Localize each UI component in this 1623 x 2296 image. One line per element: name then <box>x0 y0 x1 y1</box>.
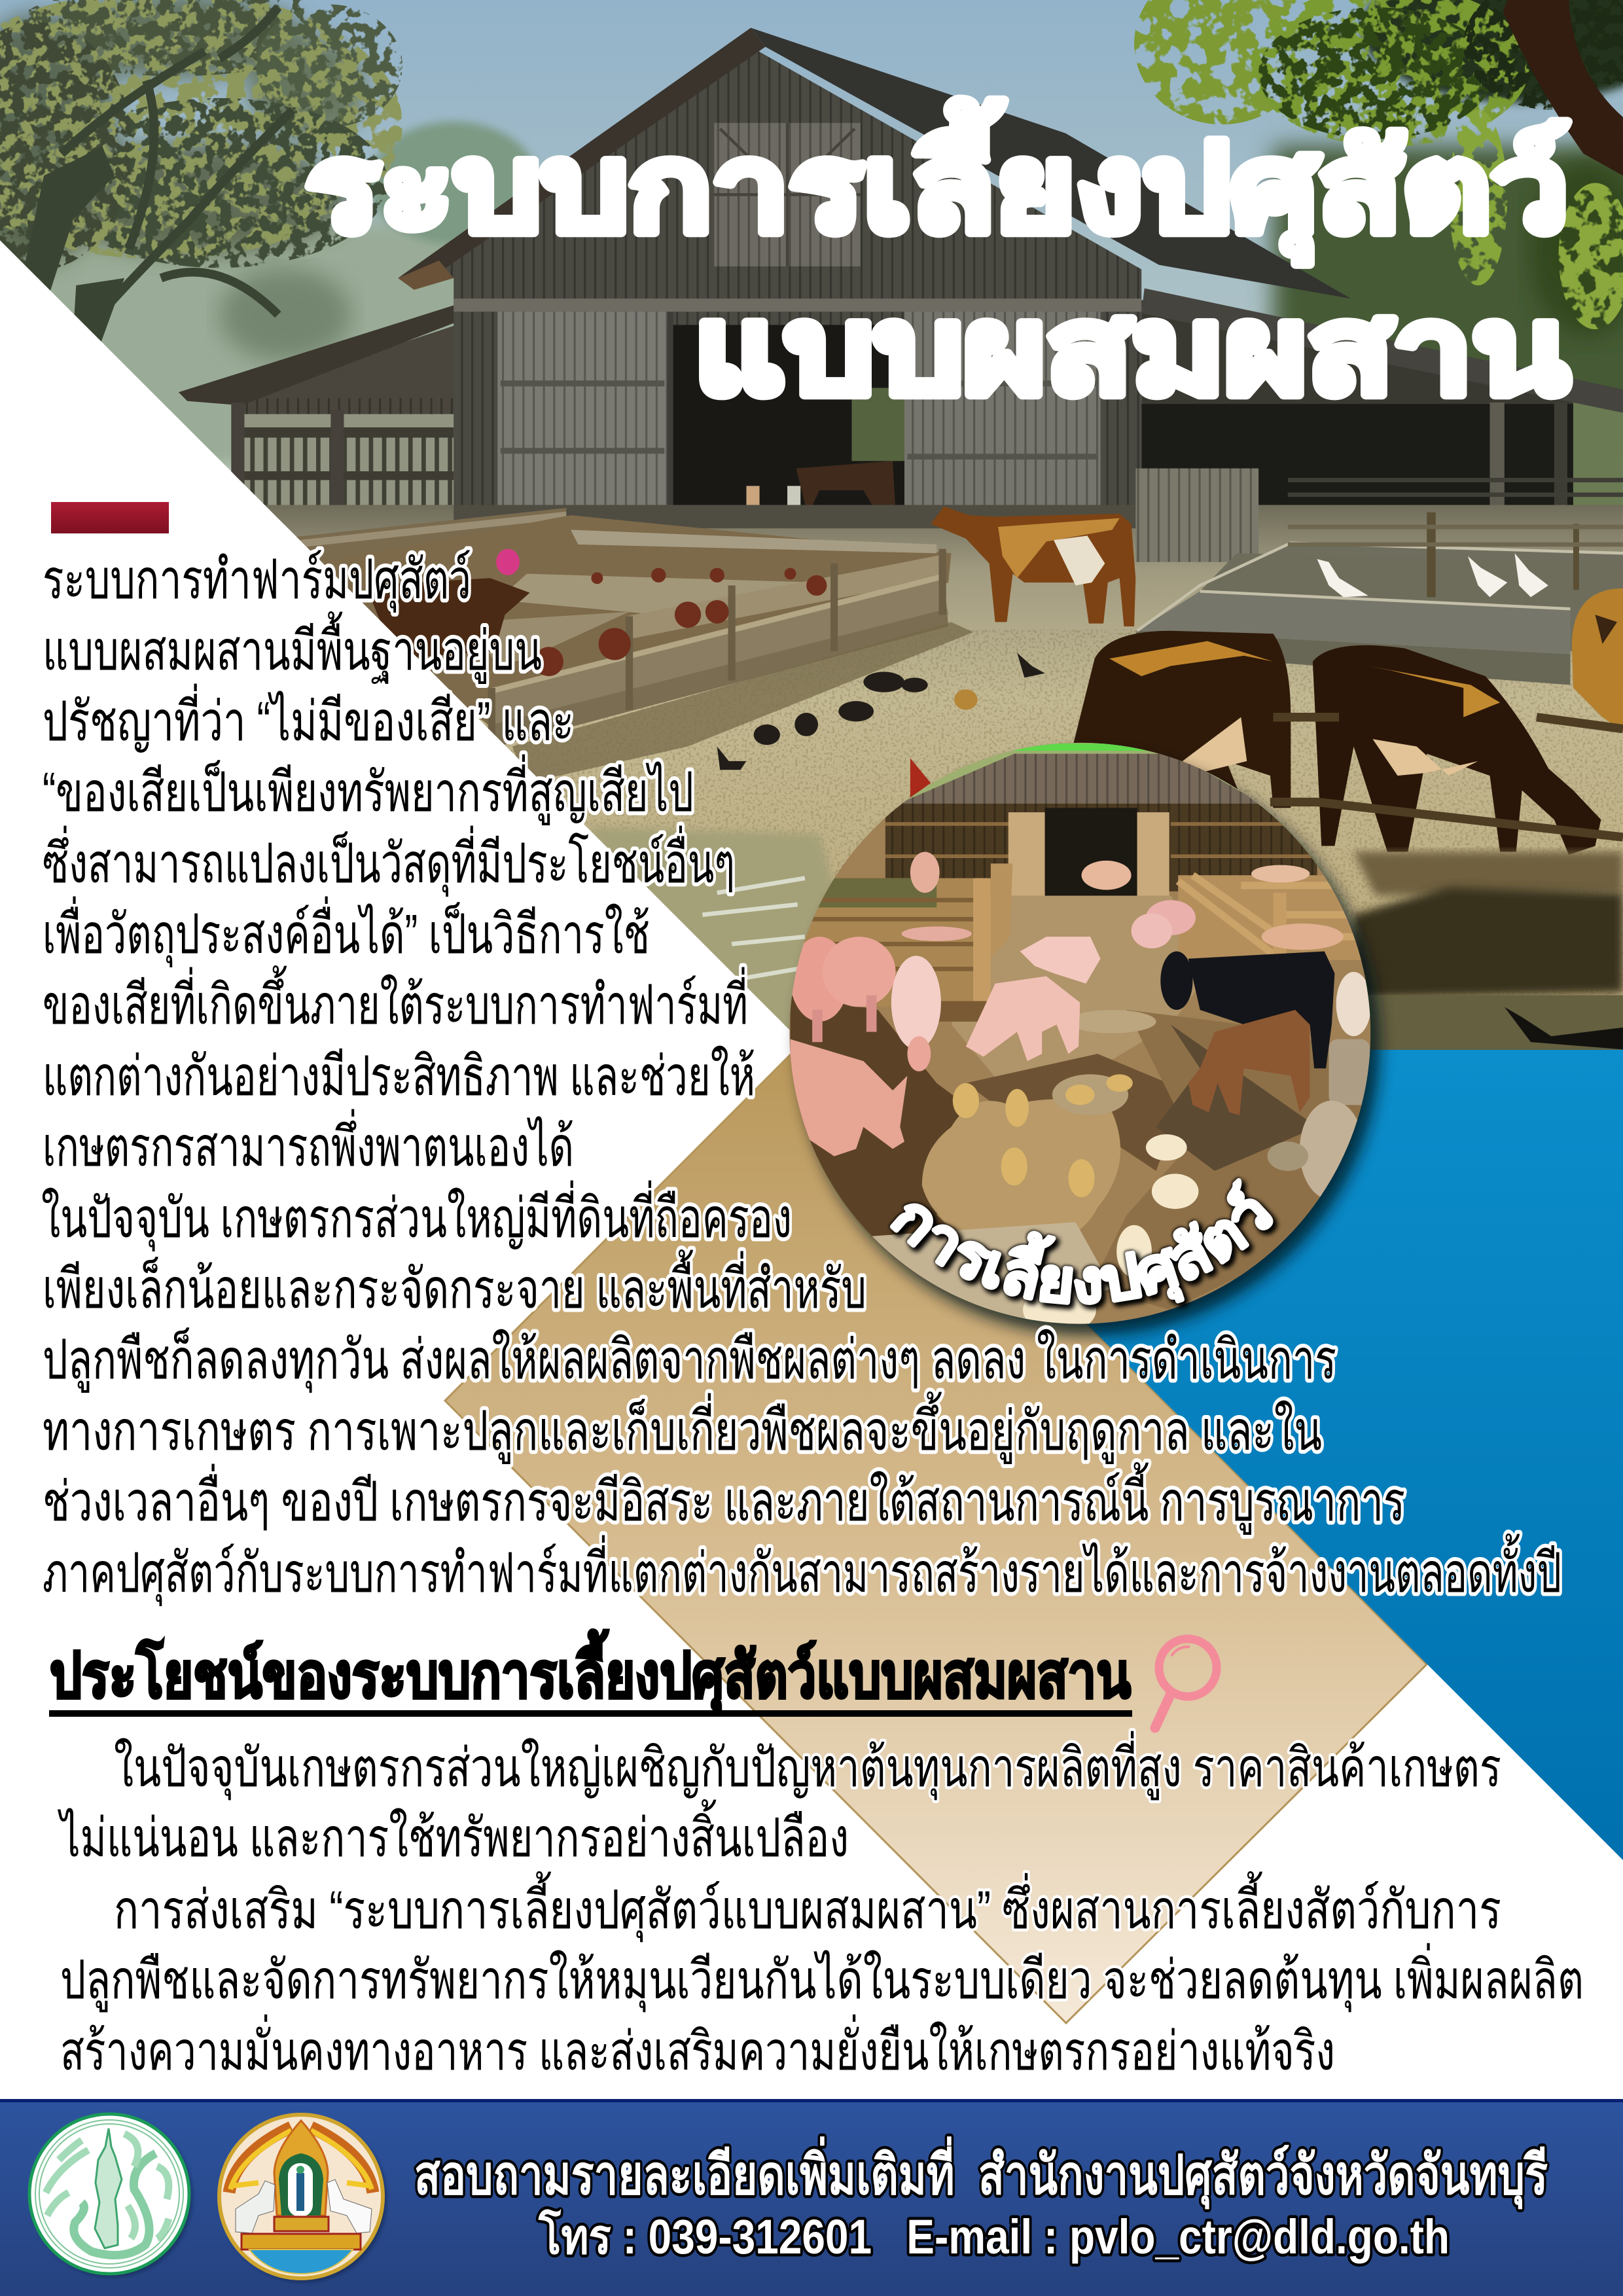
intro text block: ในปัจจุบัน เกษตรกรส่วนใหญ่มีที่ดินที่ถือครอง <box>41 1180 792 1252</box>
yard <box>0 505 1623 1049</box>
brown and white cow standing <box>931 507 1135 626</box>
footer contact text: โทร : 039-312601 E-mail : pvlo_ctr@dld.go.th <box>538 2208 1450 2264</box>
logo: Chanthaburi province seal <box>219 2115 387 2282</box>
intro text block: เพียงเล็กน้อยและกระจัดกระจาย และพื้นที่สำหรับ <box>43 1249 866 1319</box>
left chicken pens <box>293 508 952 746</box>
intro text block: “ของเสียเป็นเพียงทรัพยากรที่สูญเสียไป <box>43 754 694 825</box>
section heading with underline <box>49 1629 1132 1717</box>
circular photo: pigs, cows and ducks at the pen <box>789 739 1376 1333</box>
puddle <box>922 1099 1120 1245</box>
right tree <box>1134 0 1623 336</box>
brown cow behind the text <box>366 549 530 658</box>
icon: magnifying glass <box>1155 1639 1217 1728</box>
chickens in the yard <box>717 653 1045 770</box>
mist and distant trees <box>0 213 454 474</box>
brown calf <box>1188 1010 1310 1115</box>
ground soil <box>791 996 995 1295</box>
cow at right edge <box>1572 588 1623 732</box>
barn doors <box>497 312 668 531</box>
loft door <box>714 123 861 266</box>
white birds <box>1317 553 1548 597</box>
intro text block: แบบผสมผสานมีพื้นฐานอยู่บน <box>43 611 542 684</box>
benefits text block: ไม่แน่นอน และการใช้ทรัพยากรอย่างสิ้นเปลือง <box>58 1799 849 1868</box>
roof <box>751 27 1351 298</box>
bank and pond at right <box>1353 852 1623 896</box>
intro text block: แตกต่างกันอย่างมีประสิทธิภาพ และช่วยให้ <box>43 1045 755 1107</box>
intro text block <box>41 548 1561 1607</box>
intro text block: เกษตรกรสามารถพึ่งพาตนเองได้ <box>43 1109 574 1177</box>
left tree <box>0 0 402 359</box>
footer contact text <box>414 2136 1548 2264</box>
throne and base <box>274 2217 329 2231</box>
barn <box>179 27 1623 531</box>
water band <box>249 2250 353 2274</box>
title: ระบบการเลี้ยงปศุสัตว์ <box>306 99 1569 264</box>
shrine arch <box>274 2121 328 2215</box>
black cow <box>1160 952 1334 1068</box>
intro text block: ของเสียที่เกิดขึ้นภายใต้ระบบการทำฟาร์มที่ <box>43 965 748 1035</box>
ornate scroll work <box>229 2127 373 2193</box>
benefits text block <box>58 1731 1584 2081</box>
concrete animal pen <box>1127 512 1623 688</box>
intro text block: เพื่อวัตถุประสงค์อื่นได้” เป็นวิธีการใช้ <box>43 896 650 968</box>
intro text block: ปรัชญาที่ว่า “ไม่มีของเสีย” และ <box>43 683 574 753</box>
upper ground <box>952 896 1215 1113</box>
right pens <box>1178 875 1368 960</box>
red accent bar <box>51 502 169 533</box>
intro text block: ซึ่งสามารถแปลงเป็นวัสดุที่มีประโยชน์อื่นๆ <box>43 825 735 897</box>
beam <box>454 298 1141 312</box>
blue diamond shape <box>916 1050 1623 1860</box>
barn gate <box>1135 469 1258 562</box>
deity figure <box>95 2128 122 2248</box>
photo: farm with barn, cows and chicken pens <box>0 0 1623 1054</box>
left pens <box>791 878 988 1007</box>
wall <box>414 47 1141 531</box>
leaf motifs <box>46 2134 169 2238</box>
left water <box>585 827 878 1049</box>
right annex <box>1141 300 1573 512</box>
dark brown cow grazing <box>1313 645 1601 855</box>
rocks <box>1336 972 1371 1036</box>
logo: Department of Livestock Development seal <box>29 2114 192 2277</box>
circle shadow <box>798 754 1380 1335</box>
big pig foreground <box>791 1039 907 1157</box>
title <box>306 99 1569 419</box>
bull and horse <box>236 2181 275 2233</box>
pigs <box>791 852 1344 1157</box>
brown cow grazing <box>1070 631 1291 808</box>
tan diamond shape <box>445 1041 1427 2023</box>
naga serpent <box>74 2153 156 2255</box>
shadow along pen fence <box>512 622 973 783</box>
title: แบบผสมผสาน <box>694 283 1569 419</box>
left annex <box>234 325 457 414</box>
section heading with underline: ประโยชน์ของระบบการเลี้ยงปศุสัตว์แบบผสมผสาน <box>50 1629 1131 1715</box>
ducks <box>953 1074 1133 1197</box>
intro text block: ระบบการทำฟาร์มปศุสัตว์ <box>43 548 471 613</box>
circular caption: การเลี้ยงปศุสัตว์ <box>887 1175 1281 1313</box>
footer bar <box>0 2099 1623 2296</box>
fence rails <box>1270 717 1623 837</box>
